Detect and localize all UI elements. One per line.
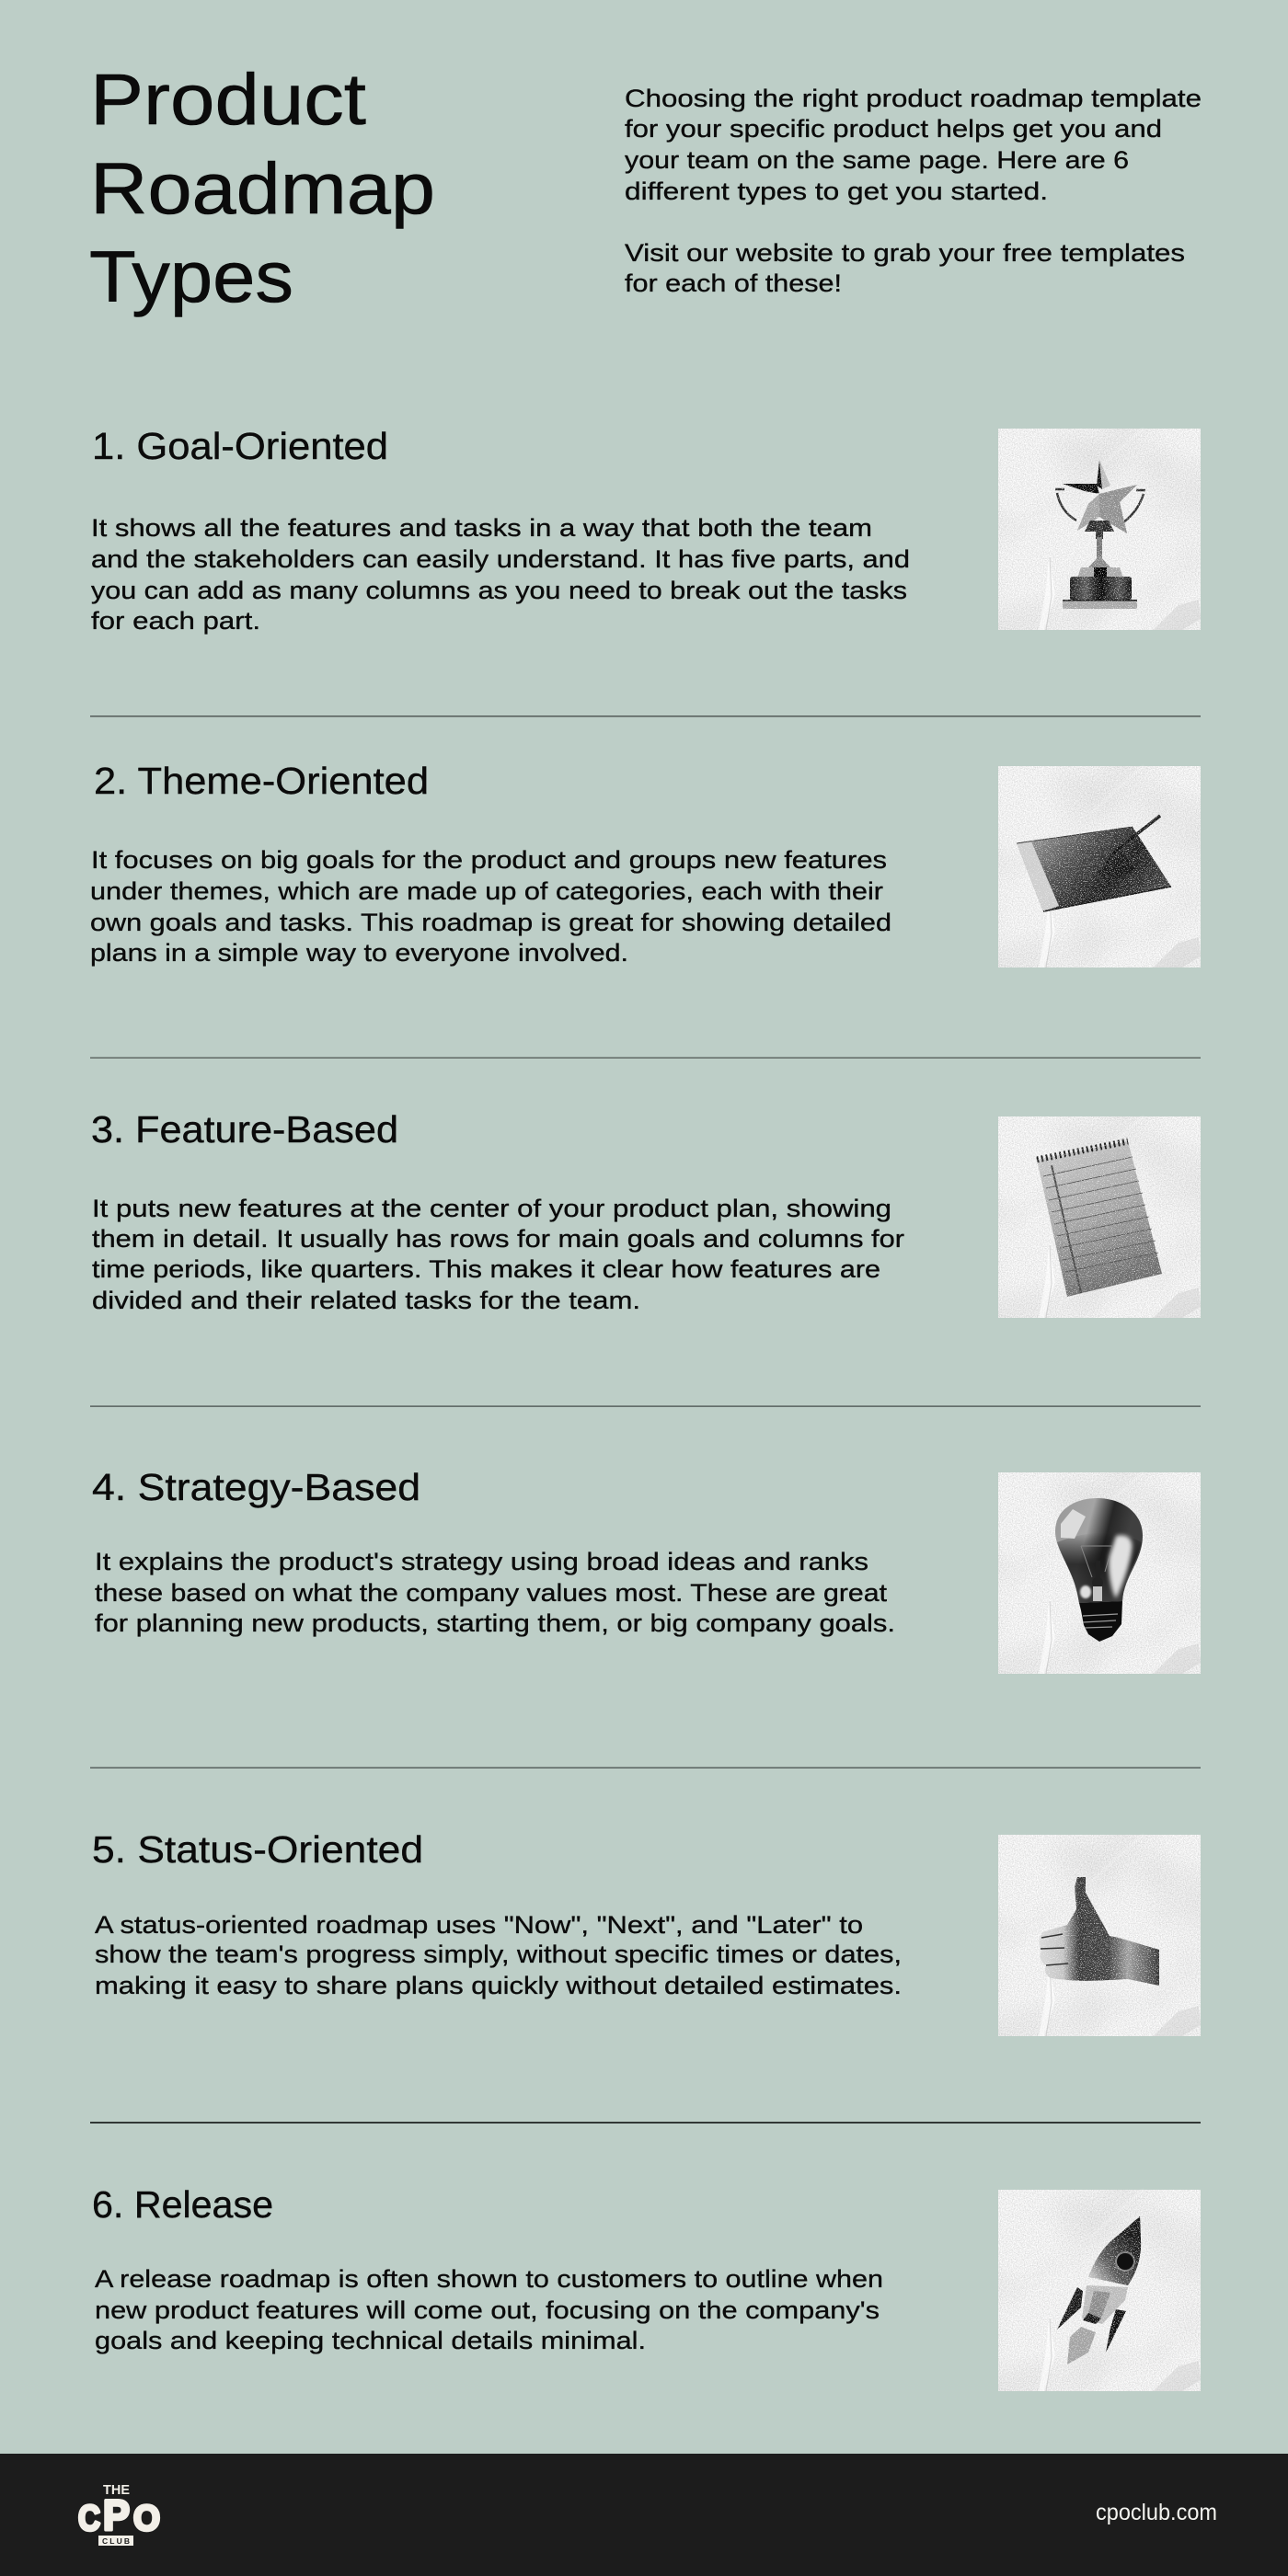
logo: The CPO Club: CLUB (102, 2536, 130, 2546)
text: Status-Oriented description: A status-oriented roadmap uses "Now", "Next", and "Later" to (95, 1911, 863, 1939)
icon: rocket (998, 2190, 1201, 2391)
title (89, 58, 435, 317)
text: Feature-Based description: divided and their related tasks for the team. (92, 1287, 640, 1314)
text: Theme-Oriented description: own goals and tasks. This roadmap is great for showing detailed (90, 909, 891, 936)
heading: Feature-Based: 3. Feature-Based (91, 1108, 398, 1151)
text: Release description (95, 2265, 883, 2354)
panel: 3 Feature-Based (91, 1108, 1201, 1318)
logo: The CPO Club: O (133, 2499, 160, 2538)
logo: The CPO Club (78, 2483, 160, 2546)
icon: thumbs up (998, 1835, 1201, 2036)
heading: Release: 6. Release (92, 2183, 273, 2226)
divider (90, 1058, 1201, 1059)
intro text: for each of these! (625, 269, 842, 297)
divider (90, 1768, 1201, 1769)
heading: Status-Oriented: 5. Status-Oriented (92, 1828, 423, 1871)
text: Theme-Oriented description: plans in a simple way to everyone involved. (90, 939, 628, 967)
footer bar (0, 2454, 1288, 2576)
website url: cpoclub.com (1096, 2500, 1217, 2525)
text: Feature-Based description: It puts new features at the center of your product plan, showing (92, 1195, 891, 1222)
text: Theme-Oriented description: It focuses on big goals for the product and groups new features (91, 846, 887, 874)
text: Goal-Oriented description: It shows all the features and tasks in a way that both the team (91, 514, 872, 542)
icon: tablet and pen (998, 766, 1201, 967)
text: Strategy-Based description: It explains the product's strategy using broad ideas and ranks (95, 1548, 868, 1575)
title: Product (90, 58, 366, 140)
text: Feature-Based description: time periods, like quarters. This makes it clear how features are (92, 1255, 880, 1283)
title: Roadmap (90, 147, 435, 229)
icon: notepad (998, 1116, 1201, 1318)
intro text: Visit our website to grab your free templates (625, 239, 1185, 267)
divider (90, 716, 1201, 717)
text: Strategy-Based description (95, 1548, 895, 1637)
intro text: your team on the same page. Here are 6 (625, 146, 1129, 174)
text: Goal-Oriented description: you can add as many columns as you need to break out the tasks (91, 577, 907, 604)
intro text: different types to get you started. (625, 177, 1048, 205)
divider (90, 1405, 1201, 1407)
panel: 4 Strategy-Based (92, 1466, 1201, 1674)
heading: Strategy-Based: 4. Strategy-Based (92, 1466, 420, 1508)
logo: The CPO Club: THE (103, 2483, 130, 2498)
text: Release description: goals and keeping technical details minimal. (95, 2327, 646, 2354)
text: Status-Oriented description: making it easy to share plans quickly without detailed estimates. (95, 1972, 902, 1999)
panel: 6 Release (92, 2183, 1201, 2391)
text: Theme-Oriented description: under themes, which are made up of categories, each with their (90, 877, 883, 905)
text: Strategy-Based description: these based on what the company values most. These are great (95, 1579, 888, 1607)
panel: 2 Theme-Oriented (90, 760, 1201, 967)
text: Goal-Oriented description (91, 514, 910, 635)
text: Theme-Oriented description (90, 846, 891, 967)
text: Goal-Oriented description: and the stakeholders can easily understand. It has five parts, and (91, 545, 910, 573)
divider (90, 2122, 1201, 2124)
intro text: for your specific product helps get you and (625, 115, 1162, 143)
icon: trophy (998, 429, 1201, 630)
heading: Theme-Oriented: 2. Theme-Oriented (94, 760, 429, 802)
heading: Goal-Oriented: 1. Goal-Oriented (92, 425, 388, 467)
logo: The CPO Club: P (103, 2491, 130, 2539)
logo: The CPO Club: C (78, 2499, 100, 2538)
text: Status-Oriented description: show the team's progress simply, without specific times or dates, (95, 1941, 902, 1968)
text: Feature-Based description: them in detail. It usually has rows for main goals and columns for (92, 1225, 904, 1253)
text: Release description: A release roadmap is often shown to customers to outline when (95, 2265, 883, 2293)
text: Status-Oriented description (95, 1911, 902, 1999)
text: Release description: new product features will come out, focusing on the company's (95, 2296, 880, 2324)
text: Feature-Based description (92, 1195, 904, 1314)
text: Goal-Oriented description: for each part. (91, 607, 260, 635)
intro text (625, 85, 1202, 297)
panel: 1 Goal-Oriented (91, 425, 1201, 635)
title: Types (89, 235, 293, 317)
panel: 5 Status-Oriented (92, 1828, 1201, 2036)
text: Strategy-Based description: for planning new products, starting them, or big company goals. (95, 1609, 895, 1637)
intro text: Choosing the right product roadmap template (625, 85, 1202, 112)
icon: light bulb (998, 1472, 1201, 1674)
